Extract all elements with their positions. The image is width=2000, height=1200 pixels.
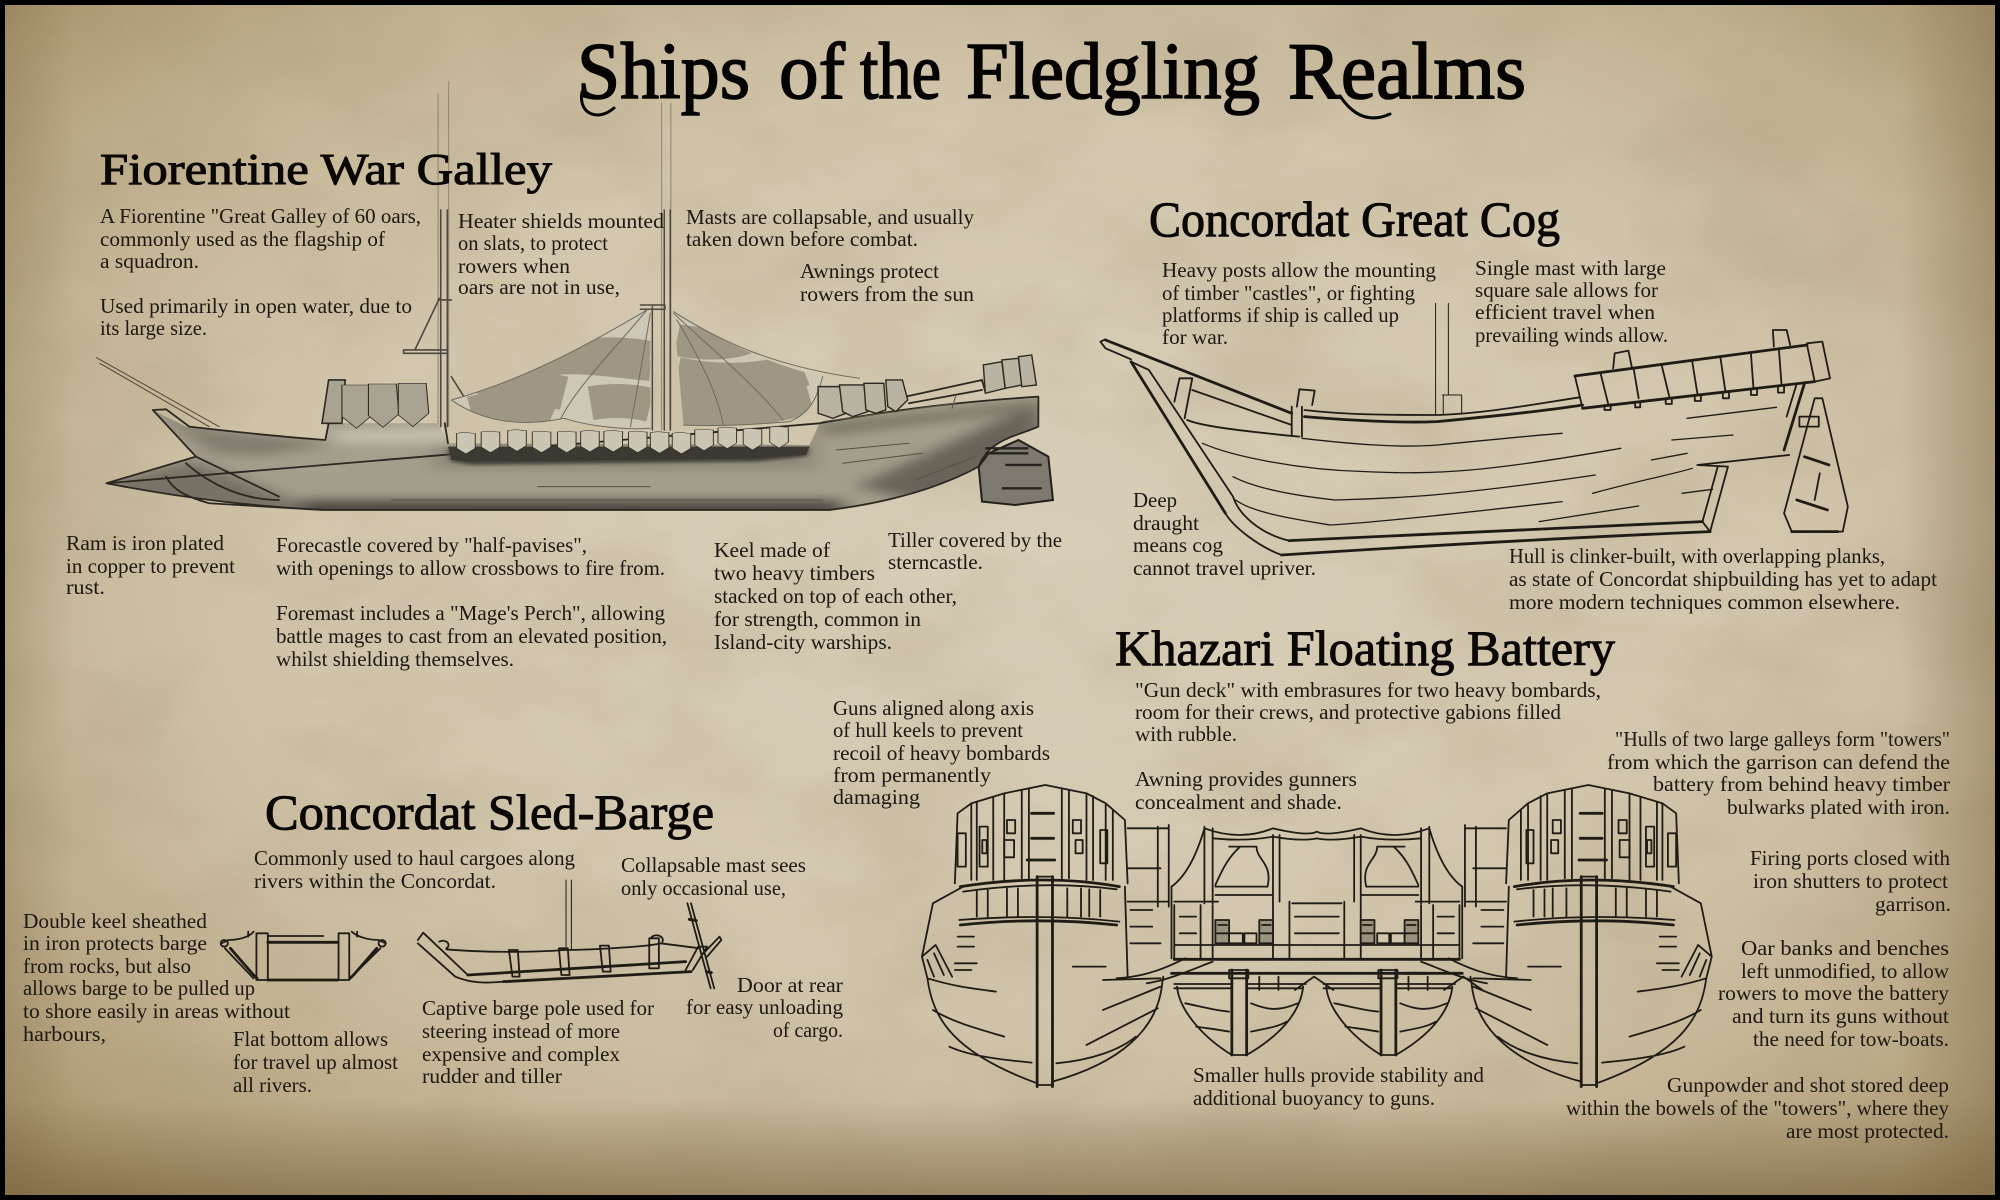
text: oar banks: rowers to move the battery	[1718, 981, 1950, 1005]
text: tiller: sterncastle.	[888, 550, 983, 574]
bowsprit	[96, 358, 219, 427]
text: heavy posts: Heavy posts allow the mounting	[1162, 258, 1436, 282]
text: awning	[1135, 767, 1357, 814]
text: galley intro: commonly used as the flagship of	[100, 227, 385, 251]
text: firing ports: iron shutters to protect	[1753, 869, 1948, 893]
cog rudder	[1784, 398, 1848, 532]
small hull right	[1323, 970, 1483, 1055]
text: heavy posts	[1162, 258, 1436, 349]
small hull left	[1174, 970, 1333, 1055]
text: clinker hull	[1509, 544, 1937, 614]
cog sheer lines	[1304, 397, 1583, 422]
text: heater shields: on slats, to protect	[458, 231, 608, 255]
text: double keel: from rocks, but also	[23, 954, 191, 978]
text: deep draught: means cog	[1133, 533, 1223, 557]
awning	[451, 310, 859, 429]
text: galley intro: its large size.	[100, 316, 207, 340]
text: smaller hulls: Smaller hulls provide stability and	[1193, 1063, 1484, 1087]
text: hulls of two galleys	[1607, 727, 1950, 819]
text: gun deck: "Gun deck" with embrasures for two heavy bombards,	[1135, 678, 1601, 702]
text: flat bottom: all rivers.	[233, 1073, 312, 1097]
text: heavy posts: platforms if ship is called up	[1162, 303, 1399, 327]
cog planking	[1202, 407, 1776, 525]
text: keel: for strength, common in	[714, 607, 922, 631]
text: forecastle and foremast: whilst shielding themselves.	[276, 647, 514, 671]
text: double keel: harbours,	[23, 1022, 106, 1046]
text: double keel	[23, 909, 290, 1046]
text: deep draught	[1133, 488, 1316, 580]
text: masts: Masts are collapsable, and usually	[686, 205, 974, 229]
text: forecastle and foremast: Foremast includes a "Mage's Perch", allowing	[276, 601, 665, 625]
main title: Ships	[577, 28, 750, 116]
text: door at rear	[686, 973, 843, 1042]
text: keel	[714, 538, 957, 654]
text: forecastle and foremast: Forecastle covered by "half-pavises",	[276, 533, 587, 557]
text: oar banks: Oar banks and benches	[1741, 936, 1949, 960]
text: galley intro: a squadron.	[100, 249, 199, 273]
text: forecastle and foremast: battle mages to cast from an elevated position,	[276, 624, 667, 648]
text: firing ports: garrison.	[1875, 892, 1951, 916]
cog hull and keel	[1282, 383, 1804, 555]
text: heater shields: Heater shields mounted	[458, 209, 665, 233]
text: oar banks: the need for tow-boats.	[1753, 1027, 1949, 1051]
text: hulls of two galleys: battery from behind heavy timber	[1653, 772, 1950, 796]
text: flat bottom: for travel up almost	[233, 1050, 398, 1074]
heading: Fiorentine War Galley: Fiorentine War Galley	[100, 145, 552, 194]
illustration: Concordat great cog	[1100, 303, 1848, 555]
text: heater shields: oars are not in use,	[458, 275, 620, 299]
text: collapsable mast: only occasional use,	[621, 876, 786, 900]
text: haul cargoes	[254, 846, 575, 893]
text: keel: stacked on top of each other,	[714, 584, 957, 608]
text: keel: two heavy timbers	[714, 561, 875, 585]
text: guns aligned: of hull keels to prevent	[833, 718, 1023, 742]
text: ram	[66, 531, 235, 599]
heading: Khazari Floating Battery: Khazari Floating Battery	[1115, 620, 1615, 676]
text: tiller	[888, 528, 1062, 574]
text: clinker hull: Hull is clinker-built, with overlapping planks,	[1509, 544, 1885, 568]
text: awnings: rowers from the sun	[800, 282, 975, 306]
text: firing ports	[1750, 846, 1951, 916]
text: deep draught: cannot travel upriver.	[1133, 556, 1316, 580]
text: deep draught: Deep	[1133, 488, 1177, 512]
sterncastle pavises	[818, 355, 1036, 418]
text: hulls of two galleys: bulwarks plated with iron.	[1727, 795, 1950, 819]
main title: of	[779, 28, 845, 116]
text: keel: Keel made of	[714, 538, 830, 562]
text: firing ports: Firing ports closed with	[1750, 846, 1950, 870]
heading: Concordat Great Cog: Concordat Great Cog	[1149, 191, 1560, 247]
text: hulls of two galleys: "Hulls of two large galleys form "towers"	[1615, 727, 1950, 751]
text: collapsable mast	[621, 853, 806, 900]
aftercastle	[1575, 330, 1830, 410]
text: single mast	[1475, 256, 1668, 347]
text: gun deck: room for their crews, and protective gabions filled	[1135, 700, 1561, 724]
text: gunpowder: Gunpowder and shot stored deep	[1667, 1073, 1949, 1097]
text: galley intro: Used primarily in open water, due to	[100, 294, 412, 318]
text: gunpowder: are most protected.	[1786, 1119, 1949, 1143]
fore mast	[404, 82, 466, 427]
rudder	[979, 440, 1053, 505]
right tower hull	[1317, 785, 1712, 1087]
title flourishes	[581, 92, 1390, 118]
text: oar banks: left unmodified, to allow	[1741, 959, 1950, 983]
text: gun deck	[1135, 678, 1601, 746]
main title: Realms	[1288, 28, 1526, 116]
text: barge pole: rudder and tiller	[422, 1064, 562, 1088]
text: smaller hulls: additional buoyancy to guns.	[1193, 1086, 1435, 1110]
text: double keel: Double keel sheathed	[23, 909, 207, 933]
text: ram: Ram is iron plated	[66, 531, 225, 555]
text: haul cargoes: rivers within the Concordat.	[254, 869, 496, 893]
text: heavy posts: for war.	[1162, 325, 1228, 349]
text: guns aligned: damaging	[833, 785, 921, 809]
text: guns aligned	[833, 696, 1050, 809]
text: clinker hull: as state of Concordat shipbuilding has yet to adapt	[1509, 567, 1937, 591]
text: single mast: efficient travel when	[1475, 300, 1656, 324]
text: gunpowder	[1566, 1073, 1949, 1143]
forecastle pavises	[322, 380, 429, 428]
text: ram: in copper to prevent	[66, 554, 235, 578]
text: guns aligned: Guns aligned along axis	[833, 696, 1034, 720]
text: awning: Awning provides gunners	[1135, 767, 1357, 791]
text: barge pole	[422, 996, 654, 1088]
main title: Fledgling	[966, 28, 1260, 116]
main mast	[640, 103, 671, 430]
text: single mast: square sale allows for	[1475, 278, 1658, 302]
text: door at rear: Door at rear	[737, 973, 843, 997]
text: double keel: in iron protects barge	[23, 931, 207, 955]
illustration: sled barge front view	[221, 932, 386, 980]
text: galley intro: A Fiorentine "Great Galley of 60 oars,	[100, 204, 421, 228]
text: clinker hull: more modern techniques common elsewhere.	[1509, 590, 1900, 614]
text: haul cargoes: Commonly used to haul cargoes along	[254, 846, 575, 870]
text: collapsable mast: Collapsable mast sees	[621, 853, 806, 877]
text: barge pole: Captive barge pole used for	[422, 996, 654, 1020]
text: heater shields: rowers when	[458, 254, 571, 278]
text: oar banks	[1718, 936, 1950, 1051]
text: masts	[686, 205, 974, 251]
heading: Concordat Sled-Barge: Concordat Sled-Barge	[265, 784, 714, 840]
waist shields	[457, 426, 788, 454]
text: flat bottom	[233, 1027, 398, 1097]
text: single mast: prevailing winds allow.	[1475, 323, 1668, 347]
text: oar banks: and turn its guns without	[1732, 1004, 1949, 1028]
text: forecastle and foremast: with openings to allow crossbows to fire from.	[276, 556, 665, 580]
text: deep draught: draught	[1133, 511, 1199, 535]
text: keel: Island-city warships.	[714, 630, 892, 654]
text: door at rear: of cargo.	[773, 1018, 843, 1042]
hull	[100, 380, 1042, 520]
left tower hull	[922, 785, 1317, 1087]
text: gunpowder: within the bowels of the "towers", where they	[1566, 1096, 1949, 1120]
text: heavy posts: of timber "castles", or fighting	[1162, 281, 1415, 305]
illustration: Fiorentine war galley	[96, 82, 1053, 520]
illustration: Khazari floating battery	[922, 785, 1712, 1087]
cog mast	[1436, 303, 1462, 415]
text: flat bottom: Flat bottom allows	[233, 1027, 388, 1051]
text: double keel: allows barge to be pulled up	[23, 976, 255, 1000]
main title	[577, 28, 1526, 118]
text: double keel: to shore easily in areas without	[23, 999, 290, 1023]
text: awning: concealment and shade.	[1135, 790, 1342, 814]
text: barge pole: steering instead of more	[422, 1019, 620, 1043]
illustration: sled barge side view	[418, 880, 721, 988]
text: heater shields	[458, 209, 665, 299]
cog prow	[1100, 339, 1315, 555]
text: single mast: Single mast with large	[1475, 256, 1666, 280]
text: ram: rust.	[66, 575, 105, 599]
text: tiller: Tiller covered by the	[888, 528, 1062, 552]
text: awnings: Awnings protect	[800, 259, 939, 283]
text: forecastle and foremast	[276, 533, 667, 671]
main title: the	[860, 28, 941, 116]
text: hulls of two galleys: from which the garrison can defend the	[1607, 750, 1950, 774]
text: smaller hulls	[1193, 1063, 1484, 1110]
text: barge pole: expensive and complex	[422, 1042, 620, 1066]
text: awnings	[800, 259, 975, 306]
text: gun deck: with rubble.	[1135, 722, 1237, 746]
text: masts: taken down before combat.	[686, 227, 918, 251]
text: guns aligned: recoil of heavy bombards	[833, 741, 1050, 765]
text: door at rear: for easy unloading	[686, 995, 843, 1019]
text: guns aligned: from permanently	[833, 763, 992, 787]
text: galley intro	[100, 204, 421, 340]
